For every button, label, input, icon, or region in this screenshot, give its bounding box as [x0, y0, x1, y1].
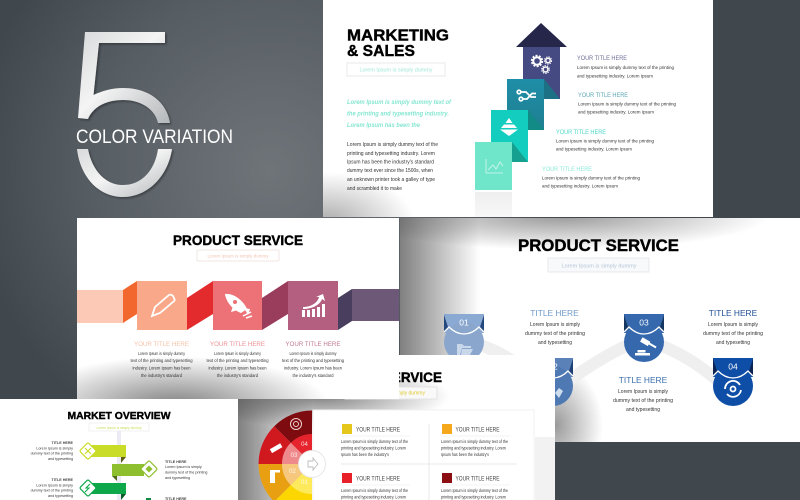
step label 1: [577, 55, 674, 80]
body paragraph: Lorem Ipsum is simply dummy text of the: [347, 142, 438, 148]
icon: line chart: [486, 159, 503, 173]
badge 03: [624, 314, 664, 362]
square: growth chart: [288, 281, 338, 330]
text block: title 03: [613, 375, 673, 413]
step label 2: Lorem Ipsum is simply dummy text of the printing: [578, 102, 676, 108]
card 02: [441, 424, 510, 457]
text block: title 02: [525, 308, 585, 346]
text block: title 02: TITLE HERE: [530, 308, 579, 318]
column 1 text: YOUR TITLE HERE: [134, 341, 189, 348]
column 2 text: Lorem Ipsum is simply dummy: [214, 351, 261, 357]
text block: title 03: Lorem Ipsum is simply: [618, 389, 668, 395]
big numeral 5 with color variation label: [76, 32, 233, 197]
badge 01: [444, 314, 484, 362]
column 1 text: the industry's standard: [141, 373, 182, 379]
text block: title 03: and typesetting: [626, 407, 660, 413]
column 3 text: industry. Lorem Ipsum has been: [284, 366, 342, 372]
text block: title 04: and typesetting: [716, 340, 750, 346]
icon: target: [290, 418, 302, 430]
column 3 text: Lorem Ipsum is simply dummy: [290, 351, 337, 357]
subtitle box: [548, 258, 649, 272]
step 3 arrow: [80, 480, 126, 500]
label 3: [31, 478, 74, 498]
heading: product service: PRODUCT SERVICE: [173, 233, 303, 248]
text block: title 02: Lorem Ipsum is simply: [530, 322, 580, 328]
card 03: YOUR TITLE HERE: [356, 476, 400, 482]
subtitle box: Lorem Ipsum is simply dummy: [357, 390, 426, 396]
column 3 text: [282, 341, 344, 379]
badge 03: 03: [639, 318, 649, 328]
text block: title 03: dummy text of the printing: [613, 398, 673, 404]
card 04: Lorem Ipsum is simply dummy text of the: [441, 488, 509, 493]
card 02: Ipsum has been the industry's: [441, 452, 489, 457]
card 03: Lorem Ipsum is simply dummy text of the: [341, 488, 409, 493]
column 2 text: [206, 341, 269, 379]
column 3 text: the industry's standard: [292, 373, 334, 379]
body paragraph: [347, 142, 438, 192]
card 01: [341, 424, 410, 457]
icon: pencil: [270, 443, 282, 453]
icon: circuit: [517, 90, 536, 101]
teal italic intro: Lorem Ipsum has been the: [347, 122, 420, 129]
label 3: dummy text of the printing: [31, 488, 73, 492]
label 1: TITLE HERE: [51, 441, 74, 445]
text block: title 04: TITLE HERE: [709, 308, 758, 318]
wheel labels: 02: [289, 469, 296, 475]
label 2: TITLE HERE: [165, 460, 187, 464]
label 1: and typesetting: [48, 457, 73, 461]
center arrow button: [298, 450, 326, 478]
heading: marketing and sales: MARKETING: [347, 28, 449, 44]
card 02: printing and typesetting industry. Lorem: [441, 446, 506, 450]
column 2 text: YOUR TITLE HERE: [210, 341, 265, 348]
column 2 text: text of the printing and typesetting: [206, 358, 269, 364]
step label 1: and typesetting industry. Lorem Ipsum: [577, 74, 653, 80]
subtitle box: Lorem Ipsum is simply dummy: [96, 426, 142, 430]
panel: orange and plum product service: [77, 218, 399, 399]
body paragraph: dummy text ever since the 1500s, when: [347, 168, 433, 174]
teal italic intro: [347, 99, 452, 129]
icon: hand: [270, 470, 280, 483]
label 1: [31, 441, 74, 461]
text block: title 04: dummy text of the printing: [703, 331, 763, 337]
heading: service: PRODUCT SERVICE: [312, 370, 442, 385]
step label 4: YOUR TITLE HERE: [542, 166, 592, 173]
label 1: Lorem Ipsum is simply: [36, 446, 73, 450]
heading: product service: PRODUCT SERVICE: [518, 237, 679, 255]
column 1 text: industry. Lorem Ipsum has been: [132, 366, 191, 372]
step label 4: [542, 166, 640, 190]
column 3 text: text of the printing and typesetting: [282, 358, 344, 364]
card 02: Lorem Ipsum is simply dummy text of the: [441, 439, 509, 444]
square: pencil: [137, 281, 187, 330]
step label 3: and typesetting industry. Lorem Ipsum: [556, 146, 632, 152]
panel: red and yellow service: [238, 355, 555, 500]
label 3: Lorem Ipsum is simply: [36, 484, 73, 488]
step 1 arrow: [80, 443, 126, 463]
wheel labels: [289, 442, 308, 486]
step 4 marker: [146, 498, 151, 500]
square: rocket: [213, 281, 262, 330]
wheel labels: 04: [301, 442, 308, 448]
label 2: Lorem Ipsum is simply: [165, 465, 202, 469]
heading: marketing and sales: & SALES: [347, 43, 415, 60]
card 04: [441, 473, 510, 500]
label 1: dummy text of the printing: [31, 452, 73, 456]
body paragraph: and scrambled it to make: [347, 186, 402, 192]
label 2: [165, 460, 207, 480]
subtitle box: [197, 250, 279, 261]
card 04: YOUR TITLE HERE: [456, 476, 500, 482]
heading: marketing and sales: [347, 28, 449, 60]
card 01: YOUR TITLE HERE: [356, 428, 400, 434]
card 01: printing and typesetting industry. Lorem: [341, 446, 406, 450]
timeline spine: [117, 431, 121, 500]
icon: gavel: [635, 337, 657, 356]
step label 4: and typesetting industry. Lorem Ipsum: [542, 184, 618, 190]
text block: title 04: Lorem Ipsum is simply: [708, 322, 758, 328]
icon: cycle: [725, 381, 741, 397]
subtitle box: Lorem Ipsum is simply dummy: [208, 254, 269, 260]
column 1 text: text of the printing and typesetting: [130, 358, 193, 364]
card 01: Ipsum has been the industry's: [341, 452, 389, 457]
card 01: Lorem Ipsum is simply dummy text of the: [341, 439, 409, 444]
body paragraph: Ipsum has been the industry's standard: [347, 160, 434, 166]
panel: marketing and sales: [323, 0, 713, 217]
step label 3: [556, 129, 654, 152]
step label 1: YOUR TITLE HERE: [577, 55, 627, 62]
label 2: and typesetting: [165, 476, 190, 480]
card grid: [313, 410, 534, 500]
badge 01: 01: [459, 318, 469, 328]
step label 3: YOUR TITLE HERE: [556, 129, 606, 136]
label 2: dummy text of the printing: [165, 470, 207, 474]
step label 3: Lorem Ipsum is simply dummy text of the printing: [556, 138, 654, 144]
icon: pyramid: [500, 118, 518, 136]
label 3: TITLE HERE: [51, 478, 74, 482]
badge 04: [713, 358, 753, 406]
body paragraph: an unknown printer took a galley of type: [347, 177, 435, 183]
card 03: [341, 473, 410, 500]
panel: market overview: [0, 399, 238, 500]
subtitle box: [89, 423, 149, 431]
heading: market overview: MARKET OVERVIEW: [68, 410, 171, 422]
half wheel chart: [258, 410, 326, 500]
teal italic intro: Lorem Ipsum is simply dummy text of: [347, 99, 452, 106]
step label 1: Lorem Ipsum is simply dummy text of the printing: [577, 65, 674, 71]
card 03: printing and typesetting industry. Lorem: [341, 494, 406, 500]
label 3: and typesetting: [48, 494, 73, 498]
folded ribbon: [77, 281, 399, 330]
text block: title 04: [703, 308, 763, 346]
column 2 text: industry. Lorem Ipsum has been: [208, 366, 267, 372]
staircase arrow chart: [475, 23, 567, 217]
subtitle box: [347, 63, 445, 76]
step 2 arrow: [112, 461, 157, 481]
badge 02: 02: [548, 362, 558, 372]
card 04: printing and typesetting industry. Lorem: [441, 494, 506, 500]
numeral 5: [77, 32, 172, 197]
column 1 text: [130, 341, 193, 379]
column 1 text: Lorem Ipsum is simply dummy: [138, 351, 185, 357]
badge 02: [533, 358, 573, 406]
wheel labels: 01: [301, 480, 308, 486]
step label 2: YOUR TITLE HERE: [578, 92, 628, 99]
step label 4: Lorem Ipsum is simply dummy text of the printing: [542, 176, 640, 182]
text block: title 03: TITLE HERE: [619, 375, 668, 385]
teal italic intro: the printing and typesetting industry.: [347, 110, 449, 118]
step label 2: and typesetting industry. Lorem Ipsum: [578, 110, 654, 116]
subtitle box: [345, 387, 437, 399]
step label 2: [578, 92, 676, 116]
subtitle box: Lorem Ipsum is simply dummy: [562, 264, 637, 270]
badge 04: 04: [728, 362, 738, 372]
panel: blue product service: [400, 218, 800, 442]
label: color variation: COLOR VARIATION: [76, 127, 233, 148]
wheel labels: 03: [291, 453, 298, 459]
text block: title 02: dummy text of the printing: [525, 331, 585, 337]
subtitle box: Lorem Ipsum is simply dummy: [360, 68, 433, 74]
column 3 text: YOUR TITLE HERE: [286, 341, 340, 348]
column 2 text: the industry's standard: [217, 373, 258, 379]
card 02: YOUR TITLE HERE: [456, 428, 500, 434]
connecting ribbon: [480, 345, 717, 380]
icon: gears: [532, 56, 552, 73]
text block: title 02: and typesetting: [538, 340, 572, 346]
body paragraph: printing and typesetting industry. Lorem: [347, 151, 435, 157]
